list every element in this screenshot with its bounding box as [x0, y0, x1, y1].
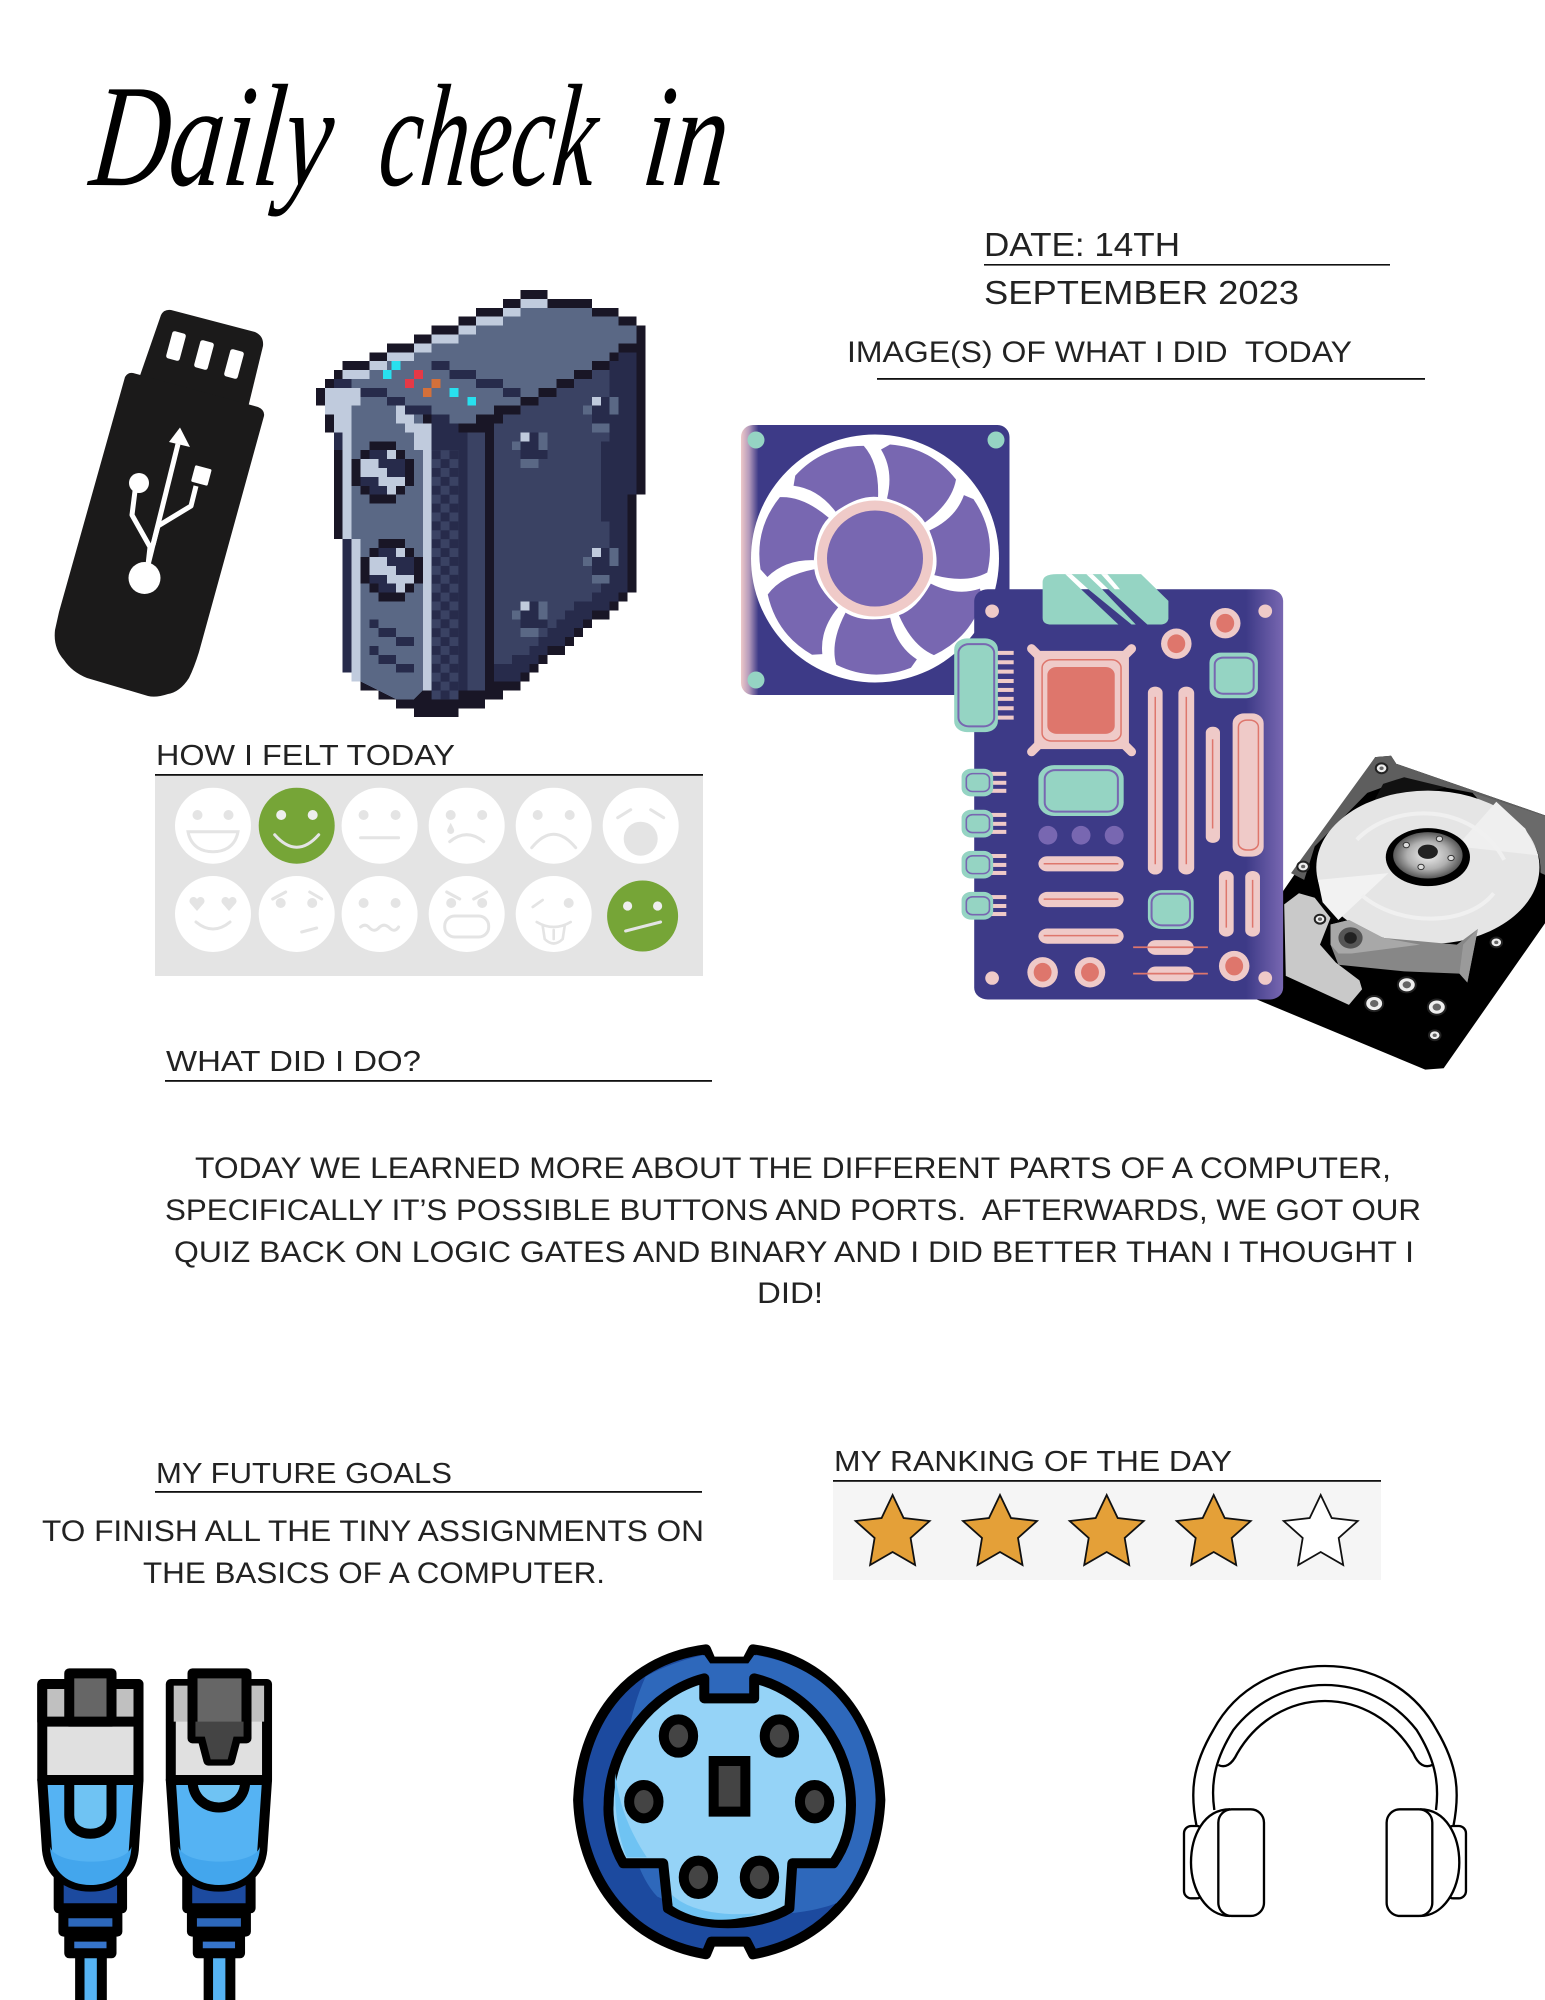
left plug	[42, 1673, 139, 2000]
heading: what did I do: WHAT DID I DO?	[166, 1046, 421, 1078]
teal chip	[1209, 653, 1258, 698]
pink slots	[1038, 687, 1264, 944]
star 4	[1177, 1495, 1251, 1565]
title: Daily	[83, 55, 342, 217]
face: sceptical	[259, 876, 335, 952]
title	[83, 55, 738, 217]
text block: what I did	[165, 1152, 1421, 1310]
text block: what I did: SPECIFICALLY IT’S POSSIBLE BUTTONS AND PORTS. AFTERWARDS, WE GOT OUR	[165, 1194, 1421, 1227]
date block: SEPTEMBER 2023	[984, 274, 1299, 311]
title: check	[373, 55, 608, 217]
face: shocked	[603, 788, 679, 864]
icon: hard drive	[1257, 756, 1545, 1070]
teal small chip	[1148, 890, 1194, 929]
text block: what I did: TODAY WE LEARNED MORE ABOUT THE DIFFERENT PARTS OF A COMPUTER,	[195, 1152, 1391, 1185]
purple dots	[1038, 826, 1124, 845]
heading: my ranking of the day: MY RANKING OF THE DAY	[834, 1446, 1232, 1478]
face: sad	[516, 788, 592, 864]
star 5 empty	[1284, 1495, 1358, 1565]
text block: future goals	[42, 1515, 704, 1590]
face: tongue out	[516, 876, 592, 952]
icon: ethernet cables	[42, 1673, 267, 2000]
heading: images of what I did today: IMAGE(S) OF WHAT I DID TODAY	[847, 336, 1352, 369]
heading: how I felt today: HOW I FELT TODAY	[156, 740, 455, 772]
face: smile selected	[259, 788, 335, 864]
panel: mood faces	[155, 776, 703, 976]
small ports	[962, 769, 1006, 920]
text block: what I did: DID!	[757, 1277, 823, 1310]
icon: pixel art computer tower	[316, 290, 645, 717]
face: hearts	[175, 876, 251, 952]
icon: motherboard	[954, 574, 1283, 1000]
text block: future goals: TO FINISH ALL THE TINY ASSIGNMENTS ON	[42, 1515, 704, 1548]
right plug	[171, 1673, 267, 2000]
face: crying	[429, 788, 505, 864]
face: neutral	[342, 788, 418, 864]
face: unsure selected	[607, 880, 678, 952]
face: big grin	[175, 788, 251, 864]
icon: ps/2 port	[578, 1649, 880, 1954]
face: angry	[429, 876, 505, 952]
face: wobbly	[342, 876, 418, 952]
left connector	[954, 638, 1014, 732]
star 2	[963, 1495, 1037, 1565]
text block: future goals: THE BASICS OF A COMPUTER.	[143, 1557, 605, 1590]
resistors	[1133, 940, 1208, 981]
cpu socket	[1032, 649, 1132, 752]
date block: DATE: 14TH	[984, 226, 1180, 263]
icon: headphones	[1184, 1666, 1466, 1916]
star 1	[856, 1495, 930, 1565]
icon: cooling fan	[741, 424, 1015, 696]
title: in	[637, 55, 738, 217]
date block	[984, 226, 1390, 311]
icon: usb drive	[55, 310, 264, 697]
text block: what I did: QUIZ BACK ON LOGIC GATES AND BINARY AND I DID BETTER THAN I THOUGHT I	[174, 1236, 1414, 1269]
panel: star rating	[833, 1482, 1381, 1580]
teal block	[1038, 765, 1124, 816]
heading: my future goals: MY FUTURE GOALS	[156, 1458, 452, 1490]
star 3	[1070, 1495, 1144, 1565]
